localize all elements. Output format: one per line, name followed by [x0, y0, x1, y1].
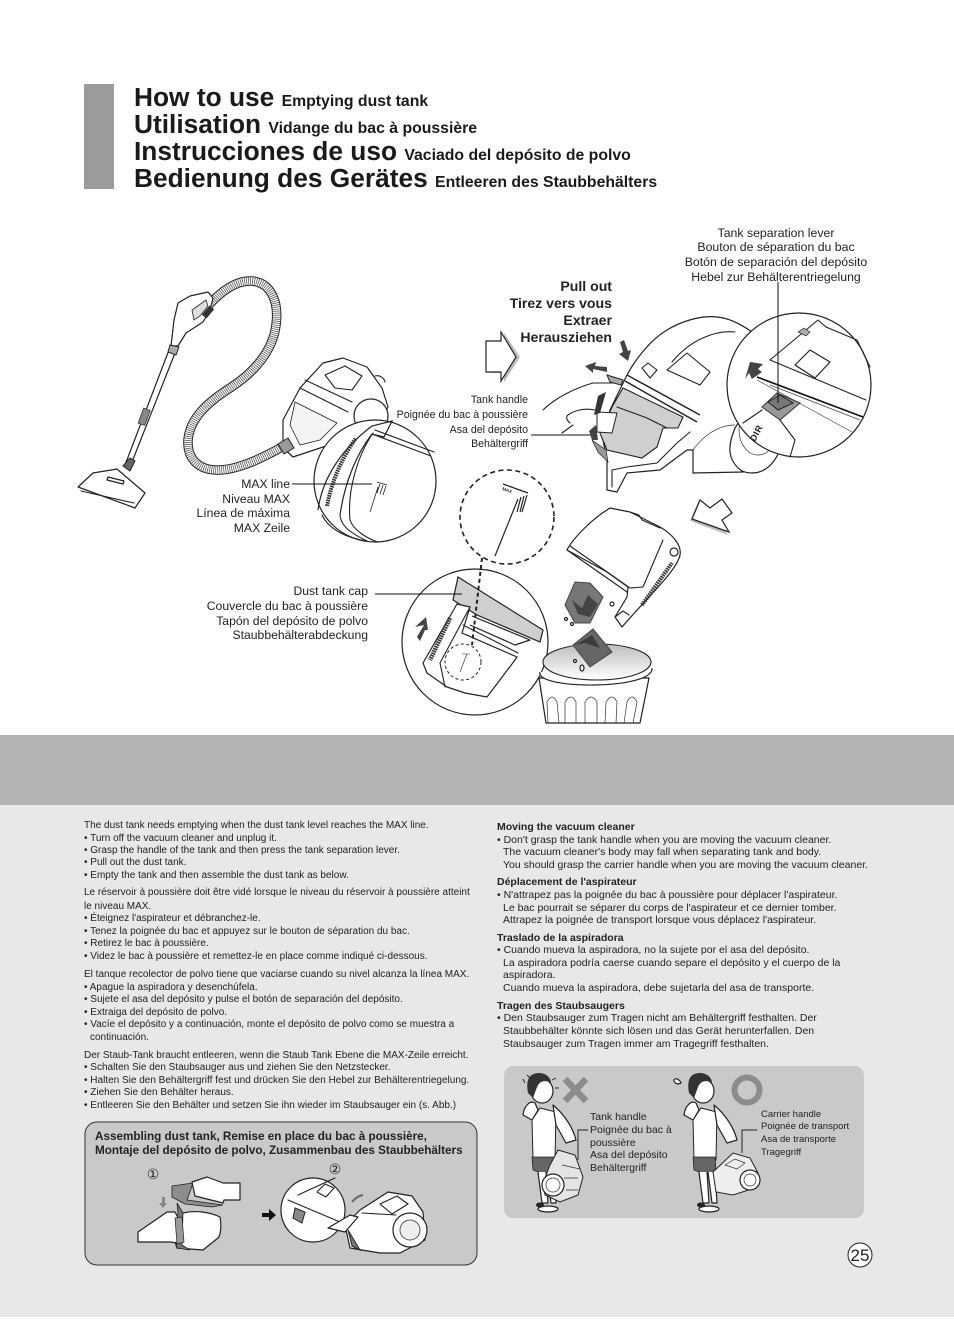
icon: circle: [734, 1078, 760, 1102]
text block: right column: Moving the vacuum cleaner: [497, 821, 635, 833]
wrong figure: [523, 1073, 583, 1212]
floor nozzle: [78, 469, 145, 508]
label: tank handle: poussière: [590, 1137, 636, 1149]
panel: correct and wrong carrying: [504, 1066, 864, 1218]
label: MAX line: [196, 477, 372, 535]
label: pull out: Pull out: [560, 278, 612, 294]
text block: left column: • Ziehen Sie den Behälter heraus.: [84, 1087, 234, 1098]
label: pull out: [510, 278, 613, 345]
label: carrier handle: [742, 1109, 850, 1158]
step 1 illustration: [138, 1177, 240, 1250]
label: tank handle: [397, 394, 592, 450]
text block: right column: • Den Staubsauger zum Tragen nicht am Behältergriff festhalten. Der: [497, 1012, 817, 1024]
step number 2: ②: [329, 1162, 341, 1178]
illustration: trash can: [539, 644, 652, 723]
text block: right column: Staubsauger zum Tragen immer am Tragegriff festhalten.: [503, 1038, 769, 1050]
label: carrier handle: Asa de transporte: [761, 1134, 836, 1145]
panel heading: [95, 1130, 463, 1157]
text block: left column: continuación.: [90, 1032, 149, 1043]
text block: left column: • Schalten Sie den Staubsauger aus und ziehen Sie den Netzstecker.: [84, 1062, 390, 1073]
text block: left column: • Vacíe el depósito y a continuación, monte el depósito de polvo como se muestra a: [84, 1019, 455, 1030]
text block: left column: • Sujete el asa del depósito y pulse el botón de separación del depósito.: [84, 994, 403, 1005]
falling dust clump: [573, 629, 612, 671]
title accent bar: [84, 84, 114, 189]
arrow: outline right: [486, 332, 520, 382]
label: MAX line: MAX Zeile: [234, 521, 290, 535]
title block: [134, 82, 657, 193]
label: tank handle: Asa del depósito: [590, 1149, 668, 1161]
panel: assembling dust tank: [85, 1122, 477, 1265]
hose: [188, 281, 282, 470]
panel heading: Montaje del depósito de polvo, Zusammenbau des Staubbehälters: [95, 1144, 463, 1157]
step number 1: ①: [147, 1167, 159, 1183]
title block: Utilisation Vidange du bac à poussière: [134, 109, 477, 139]
illustration: tank emptying upside down: [564, 508, 680, 627]
text block: right column: La aspiradora podría caerse cuando separe el depósito y el cuerpo de la: [503, 957, 841, 969]
wheel: [722, 397, 782, 473]
label: dust tank cap: Couvercle du bac à poussière: [207, 599, 368, 613]
label: tank handle: Poignée du bac à poussière: [397, 409, 528, 421]
dust clumps: [565, 582, 603, 623]
label: tank separation lever: Hebel zur Behälterentriegelung: [691, 270, 861, 284]
text block: left column: le niveau MAX.: [84, 901, 151, 912]
title block: Bedienung des Gerätes Entleeren des Staubbehälters: [134, 163, 657, 193]
text block: left column: • Halten Sie den Behältergriff fest und drücken Sie den Hebel zur Behälterentriegelung.: [84, 1075, 469, 1086]
magnifier: dashed MAX detail: [460, 470, 554, 564]
magnifier: separation lever: DIR: [748, 423, 765, 443]
label: dust tank cap: Dust tank cap: [293, 584, 368, 598]
label: tank separation lever: [685, 226, 867, 284]
panel: gray band: [0, 735, 954, 805]
text block: right column: Tragen des Staubsaugers: [497, 1000, 625, 1012]
label: pull out: Tirez vers vous: [510, 295, 612, 311]
magnifier: MAX line: [314, 420, 436, 542]
page number: 25: [851, 1246, 869, 1265]
text block: right column: • Cuando mueva la aspiradora, no la sujete por el asa del depósito.: [497, 944, 809, 956]
arrow: outline down-left: [690, 499, 732, 535]
text block: right column: • N'attrapez pas la poignée du bac à poussière pour déplacer l'aspirateur.: [497, 889, 837, 901]
label: pull out: Herausziehen: [520, 329, 612, 345]
text block: left column: • Éteignez l'aspirateur et débranchez-le.: [84, 911, 261, 924]
canister body: [603, 317, 760, 492]
step 2 illustration: [281, 1178, 427, 1253]
label: dust tank cap: Tapón del depósito de polvo: [216, 614, 368, 628]
hand: [543, 383, 617, 433]
text block: left column: • Grasp the handle of the tank and then press the tank separation lever.: [84, 845, 400, 856]
illustration: pulling dust tank out: [543, 317, 782, 492]
label: MAX line: MAX line: [241, 477, 290, 491]
magnifier: dashed MAX detail: MAX: [502, 486, 513, 494]
text block: left column: [84, 820, 470, 1111]
illustration: vacuum cleaner overview: [78, 281, 388, 508]
correct figure: [674, 1073, 760, 1212]
text block: right column: Cuando mueva la aspiradora, debe sujetarla del asa de transporte.: [503, 982, 814, 994]
text block: left column: • Apague la aspiradora y desenchúfela.: [84, 982, 258, 993]
label: tank handle: Asa del depósito: [450, 424, 528, 436]
text block: left column: The dust tank needs emptying when the dust tank level reaches the MAX line.: [84, 820, 429, 831]
label: tank handle: Behältergriff: [590, 1162, 647, 1174]
text block: right column: You should grasp the carrier handle when you are moving the vacuum cleaner.: [503, 859, 868, 871]
arrows: [619, 340, 631, 361]
text block: right column: Staubbehälter könnte sich lösen und das Gerät herunterfallen. Den: [503, 1025, 814, 1037]
label: dust tank cap: [207, 584, 462, 642]
title block: How to use Emptying dust tank: [134, 82, 428, 112]
text block: right column: Le bac pourrait se séparer du corps de l'aspirateur et ce dernier tomber.: [503, 902, 837, 914]
label: tank handle: [578, 1111, 672, 1174]
text block: left column: El tanque recolector de polvo tiene que vaciarse cuando su nivel alcanza la línea MAX.: [84, 969, 469, 980]
page number: [848, 1243, 872, 1267]
label: dust tank cap: Staubbehälterabdeckung: [232, 628, 368, 642]
label: tank handle: Behältergriff: [471, 438, 528, 450]
label: tank handle: Tank handle: [590, 1111, 647, 1123]
text block: left column: Le réservoir à poussière doit être vidé lorsque le niveau du réservoir à poussière atteint: [84, 887, 470, 898]
text block: left column: • Videz le bac à poussière et remettez-le en place comme indiqué ci-dessous.: [84, 951, 428, 962]
text block: right column: [497, 821, 868, 1050]
label: MAX line: Niveau MAX: [222, 492, 290, 506]
magnifier: dust tank cap: [402, 558, 548, 715]
text block: left column: • Pull out the dust tank.: [84, 857, 186, 868]
text block: right column: Déplacement de l'aspirateur: [497, 876, 637, 888]
canister body: [283, 358, 388, 457]
wand: [125, 350, 175, 467]
label: MAX line: Línea de máxima: [196, 506, 290, 520]
icon: cross: [565, 1079, 586, 1101]
text block: right column: aspiradora.: [503, 969, 556, 981]
gray dust tank: [600, 388, 683, 458]
panel: light instructions background: [0, 805, 954, 1317]
text block: left column: • Retirez le bac à poussière.: [84, 938, 209, 949]
text block: left column: • Entleeren Sie den Behälter und setzen Sie ihn wieder im Staubsauger ein (s. Abb.): [84, 1100, 456, 1111]
text block: left column: • Extraiga del depósito de polvo.: [84, 1007, 227, 1018]
label: carrier handle: Tragegriff: [761, 1147, 801, 1158]
panel heading: Assembling dust tank, Remise en place du bac à poussière,: [95, 1130, 427, 1143]
text block: right column: Traslado de la aspiradora: [497, 932, 624, 944]
label: tank separation lever: Bouton de séparation du bac: [697, 240, 855, 254]
text block: right column: • Don't grasp the tank handle when you are moving the vacuum cleaner.: [497, 834, 831, 846]
label: tank separation lever: Tank separation lever: [718, 226, 834, 240]
text block: left column: Der Staub-Tank braucht entleeren, wenn die Staub Tank Ebene die MAX-Zeile erreicht.: [84, 1050, 468, 1061]
text block: right column: Attrapez la poignée de transport lorsque vous déplacez l'aspirateur.: [503, 914, 816, 926]
handle grip: [171, 292, 213, 346]
label: tank handle: Poignée du bac à: [590, 1124, 672, 1136]
magnifier: separation lever: [727, 282, 871, 457]
label: tank handle: Tank handle: [471, 394, 528, 406]
label: carrier handle: Poignée de transport: [761, 1121, 850, 1132]
text block: left column: • Turn off the vacuum cleaner and unplug it.: [84, 833, 277, 844]
title block: Instrucciones de uso Vaciado del depósito de polvo: [134, 136, 631, 166]
text block: right column: The vacuum cleaner's body may fall when separating tank and body.: [503, 846, 821, 858]
text block: left column: • Empty the tank and then assemble the dust tank as below.: [84, 870, 349, 881]
label: carrier handle: Carrier handle: [761, 1109, 821, 1120]
label: tank separation lever: Botón de separación del depósito: [685, 255, 867, 269]
label: pull out: Extraer: [563, 312, 613, 328]
text block: left column: • Tenez la poignée du bac et appuyez sur le bouton de séparation du bac.: [84, 926, 410, 937]
arrow: step: [262, 1209, 276, 1221]
